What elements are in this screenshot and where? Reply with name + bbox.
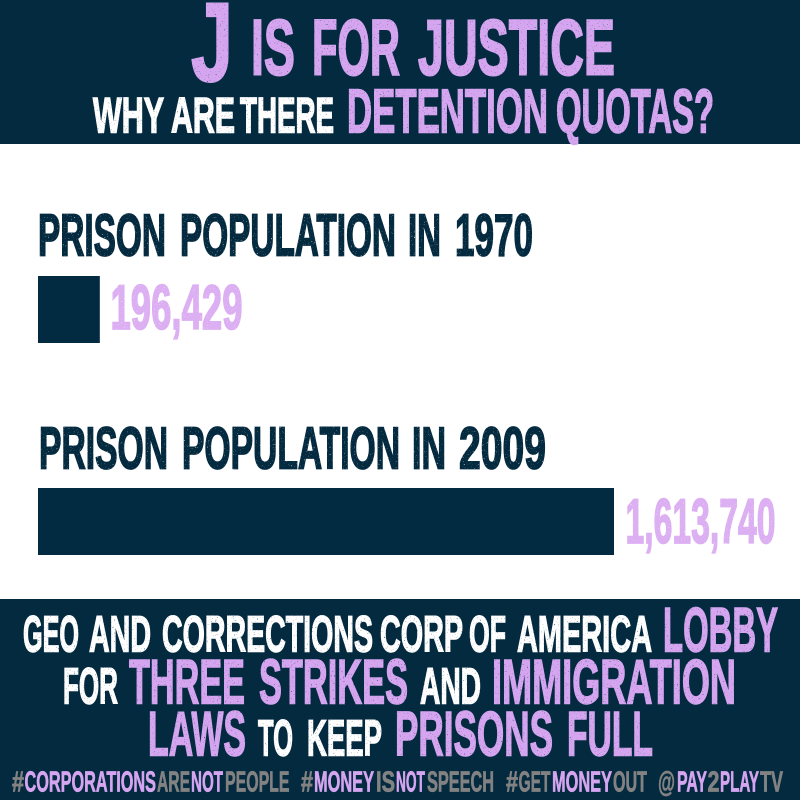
hashtags: @: [658, 766, 675, 798]
hashtags: CORPORATIONS: [24, 766, 156, 798]
hashtags: PLAY: [720, 766, 759, 798]
hashtags: 2: [708, 766, 720, 798]
title: FOR: [312, 2, 400, 92]
statement text: FULL: [567, 700, 653, 770]
bar: 2009: [38, 488, 614, 555]
subtitle: [93, 78, 714, 146]
subtitle: DETENTION: [347, 78, 548, 146]
header band: [0, 0, 800, 146]
hashtags: SPEECH: [427, 766, 494, 798]
statement text: FOR: [63, 658, 118, 714]
title: IS: [251, 2, 295, 92]
heading: 1970: IN: [408, 202, 441, 268]
subtitle: WHY: [93, 88, 164, 144]
hashtags: [12, 766, 783, 798]
statement text: STRIKES: [259, 648, 408, 718]
hashtags: PAY: [677, 766, 707, 798]
title: [191, 0, 615, 105]
subtitle: ARE: [171, 88, 235, 144]
statement text: AND: [89, 606, 151, 662]
statement text: THREE: [129, 648, 245, 718]
hashtags: TV: [760, 766, 783, 798]
statement text: CORRECTIONS: [162, 606, 373, 662]
statement text: PRISONS: [395, 700, 553, 770]
heading: 1970: PRISON: [38, 202, 166, 268]
hashtags: MONEY: [552, 766, 612, 798]
hashtags: IS: [376, 766, 395, 798]
hashtags: MONEY: [314, 766, 374, 798]
hashtags: PEOPLE: [225, 766, 290, 798]
hashtags: #: [12, 766, 24, 798]
subtitle: THERE: [240, 88, 334, 144]
value: 196,429: 196,429: [110, 273, 242, 343]
statement text: CORP: [380, 606, 463, 662]
heading: 2009: POPULATION: [182, 416, 400, 482]
chart: prison population 1970: [38, 202, 533, 343]
statement text: AND: [420, 658, 481, 714]
heading: 1970: [38, 202, 533, 268]
heading: 1970: 1970: [455, 202, 533, 268]
statement text: [23, 596, 778, 770]
chart: prison population 2009: [38, 416, 776, 557]
hashtags: NOT: [191, 766, 223, 798]
statement text: KEEP: [307, 710, 382, 766]
hashtags: GET: [518, 766, 551, 798]
hashtags: NOT: [396, 766, 425, 798]
statement text: AMERICA: [517, 606, 652, 662]
heading: 2009: 2009: [459, 416, 546, 482]
heading: 2009: PRISON: [39, 416, 168, 482]
heading: 2009: [39, 416, 546, 482]
heading: 1970: POPULATION: [180, 202, 396, 268]
hashtags: OUT: [613, 766, 647, 798]
bar: 1970: [38, 276, 100, 343]
statement text: LAWS: [148, 700, 246, 770]
title: JUSTICE: [418, 2, 615, 92]
footer band: [0, 596, 800, 800]
statement text: GEO: [23, 606, 79, 662]
statement text: OF: [469, 606, 506, 662]
hashtags: ARE: [157, 766, 190, 798]
hashtags: #: [506, 766, 518, 798]
heading: 2009: IN: [412, 416, 446, 482]
statement text: TO: [258, 710, 293, 766]
hashtags: #: [301, 766, 313, 798]
